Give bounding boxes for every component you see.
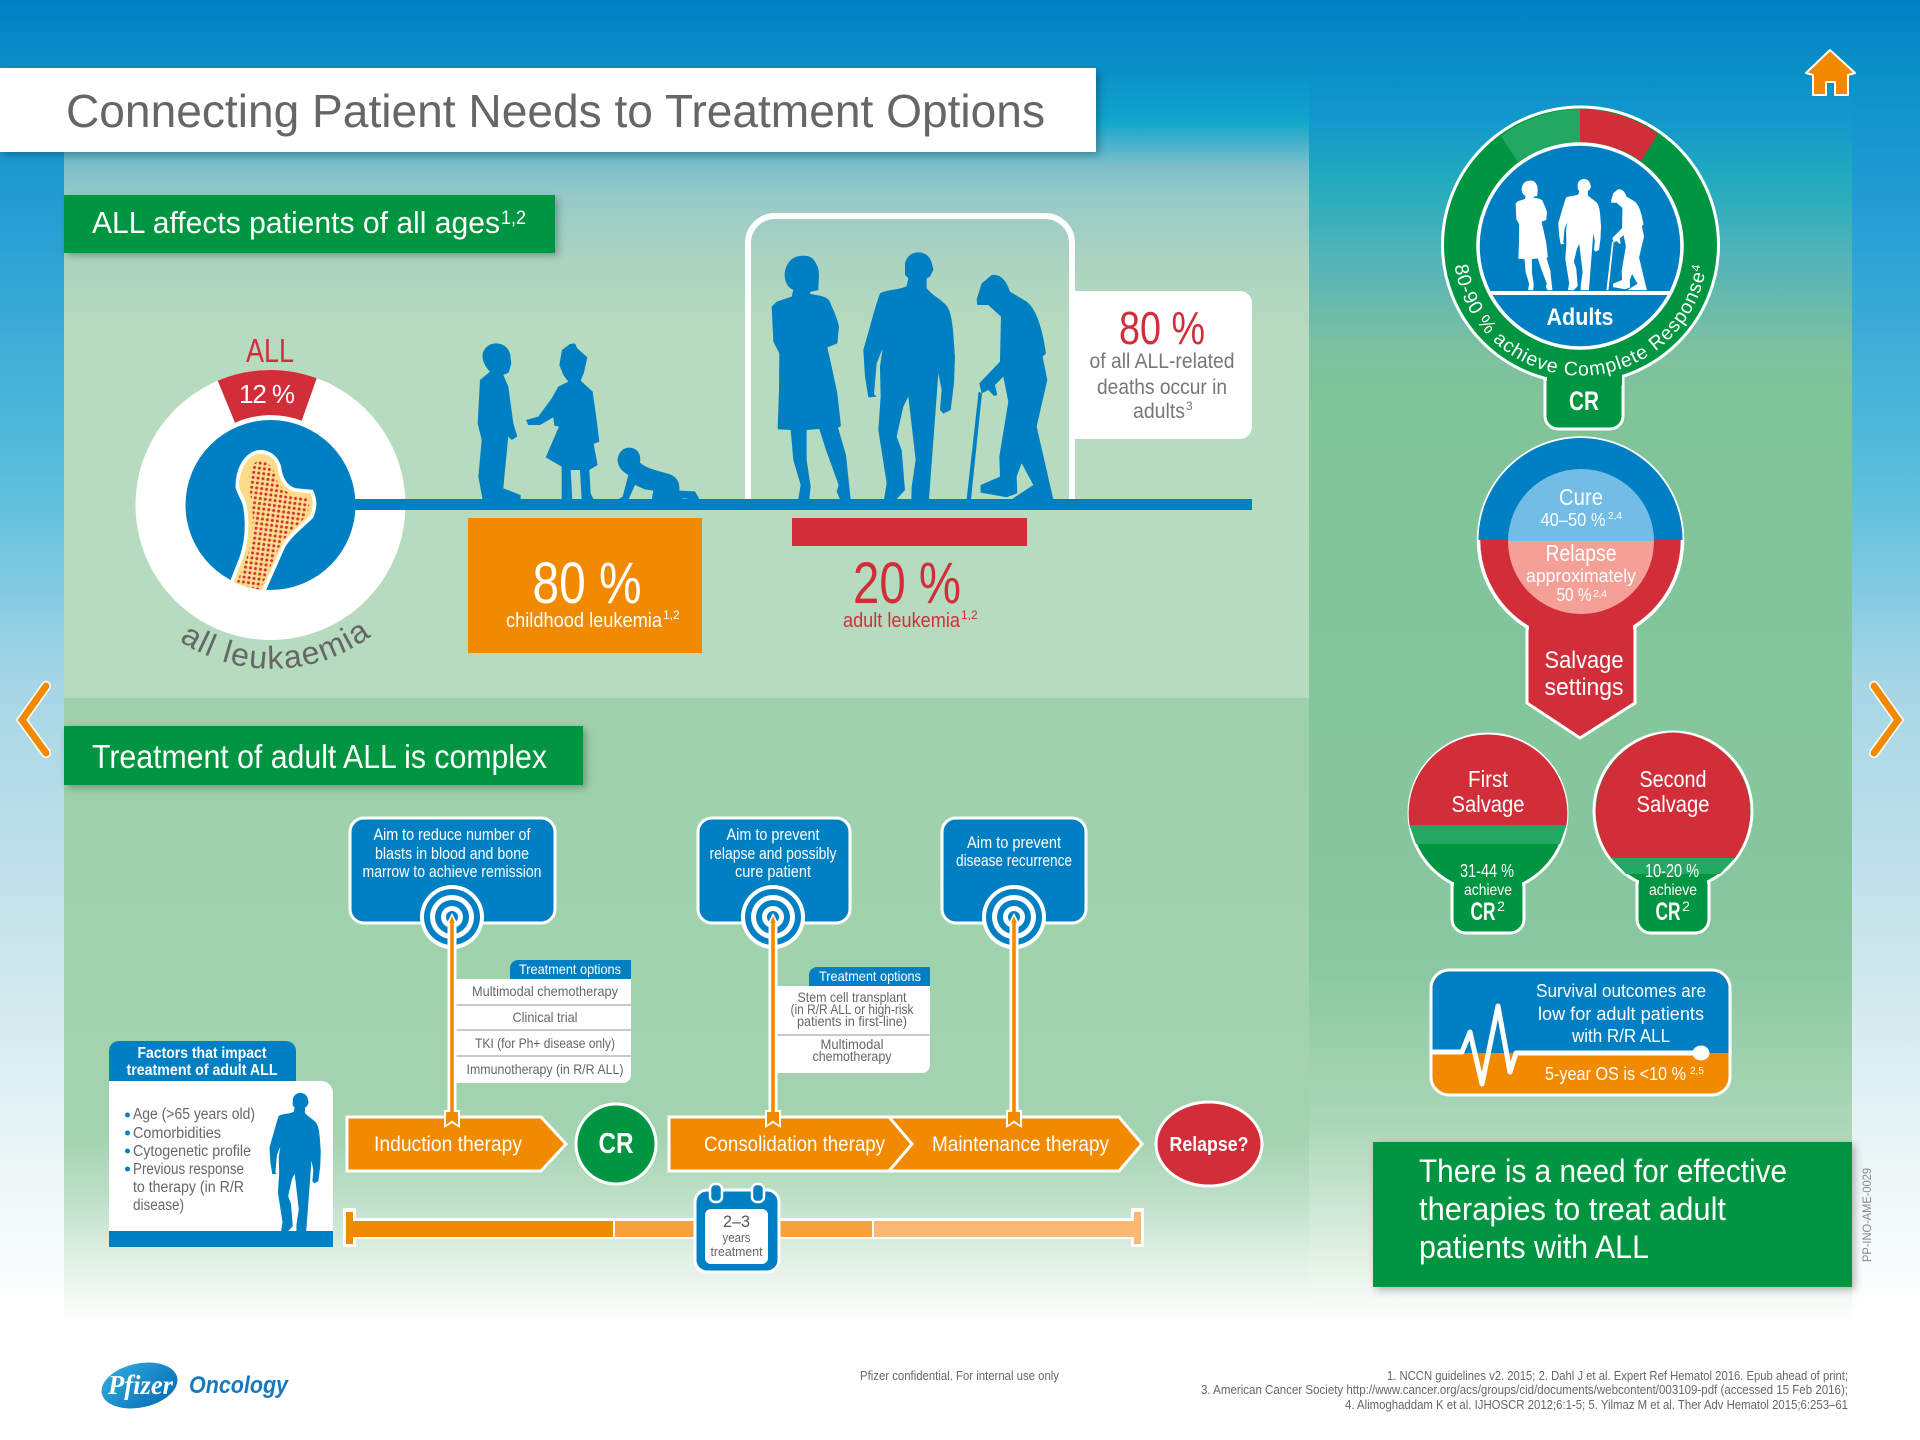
references: 4. Alimoghaddam K et al. IJHOSCR 2012;6:1-5; 5. Yilmaz M et al. Ther Adv Hematol 2015;6:253–61 [1345,1398,1848,1412]
heading: treatment of adult ALL is complex: Treatment of adult ALL is complex [92,738,547,775]
chart: first salvage: CR [1470,898,1496,926]
panel: treatment options consolidation: Multimodal [820,1036,884,1052]
panel: treatment options induction [456,960,631,1083]
arrow: consolidation therapy [669,1117,912,1171]
icon: target induction [420,885,484,949]
callout: consolidation aim: cure patient [735,863,811,881]
badge: relapse [1156,1102,1262,1186]
callout: maintenance aim: Aim to prevent [967,834,1061,852]
callout: 80 percent of deaths: 3 [1186,399,1193,413]
icon: calendar 2-3 years treatment: years [722,1231,750,1245]
chart: cure versus relapse: settings [1544,674,1624,701]
chart: cure versus relapse: Relapse [1546,540,1616,566]
chart: all leukaemia donut [136,332,406,669]
list: factors: Cytogenetic profile [133,1143,251,1160]
panel: childhood leukemia 80 percent [468,518,702,653]
heading: ALL affects patients of all ages: 1,2 [501,208,526,229]
chart: first salvage: 2 [1497,898,1505,914]
panel: survival outcomes [1431,970,1730,1095]
arrow: next [1874,686,1898,753]
panel: treatment options consolidation: Treatment options [819,968,921,984]
panel: adult leukemia 20 percent: 20 % [853,551,961,616]
panel: survival outcomes: low for adult patients [1538,1004,1704,1024]
icon: target maintenance [982,885,1046,949]
icon: bone [230,452,315,593]
panel: right column outcomes [1372,106,1871,1294]
callout: need for effective therapies [1373,1142,1852,1287]
icon: home [1806,50,1855,95]
icon: man silhouette [269,1093,321,1231]
panel: treatment options induction: Immunotherapy (in R/R ALL) [466,1061,624,1077]
confidentiality note: Pfizer confidential. For internal use only [860,1369,1060,1383]
arrow: maintenance therapy: Maintenance therapy [932,1133,1109,1156]
label: ring text: 80-90 % achieve Complete Response [1455,264,1704,376]
label: all leukaemia: all leukaemia [182,625,372,669]
chart: first salvage: Salvage [1452,791,1524,817]
icon: target consolidation [741,885,805,949]
icon: children silhouettes [478,343,700,500]
chart: cure versus relapse [1478,438,1682,738]
panel: factors that impact treatment [109,1041,333,1247]
panel: survival outcomes: 2,5 [1690,1066,1704,1077]
panel: childhood leukemia 80 percent: childhood leukemia [506,610,663,632]
icon: calendar 2-3 years treatment: 2–3 [723,1212,750,1231]
callout: need for effective therapies: There is a need for effective [1419,1153,1787,1189]
panel: childhood leukemia 80 percent: 1,2 [663,608,680,622]
panel: treatment options consolidation: (in R/R ALL or high-risk [790,1001,914,1017]
chart: cure versus relapse: approximately [1526,566,1636,586]
icon: calendar 2-3 years treatment: treatment [710,1245,763,1259]
label: ring text: 4 [1692,265,1700,272]
logo: Pfizer Oncology: Pfizer [107,1370,173,1400]
circle: blue core [186,420,356,590]
callout: induction aim [350,818,555,923]
callout: 80 percent of deaths: deaths occur in [1097,376,1227,399]
arrow: maintenance to target [1006,913,1022,1128]
arrow: previous [22,686,46,753]
list: factors: to therapy (in R/R [133,1179,244,1196]
arrow: induction therapy: Induction therapy [374,1133,522,1156]
panel: ALL affects patients [63,194,1252,669]
panel: lower left background [64,698,1309,1330]
heading: treatment of adult ALL is complex [64,726,583,785]
panel: treatment options induction: Multimodal chemotherapy [472,983,618,999]
label: CR: CR [1569,386,1599,416]
chart: cure versus relapse: 40–50 % [1540,510,1606,530]
chart: cure versus relapse: 2,4 [1593,589,1607,600]
list: factors: Comorbidities [133,1125,221,1142]
panel: survival outcomes: 5-year OS is <10 % [1545,1064,1686,1084]
panel: adult leukemia 20 percent: adult leukemia [843,610,961,632]
shape: salvage settings arrow [1527,620,1635,738]
panel: survival outcomes: with R/R ALL [1571,1026,1670,1046]
panel: treatment options consolidation: Stem cell transplant [798,989,907,1005]
icon: adult silhouettes white [1516,179,1647,290]
arrow: consolidation therapy: Consolidation therapy [704,1133,885,1156]
segment: relapse [1580,109,1658,161]
heading: factors [109,1041,296,1081]
panel: adult leukemia 20 percent [792,518,1027,632]
title [0,68,1096,152]
chart: second salvage [1594,732,1752,933]
chart: adults complete response ring [1441,106,1720,430]
references: 1. NCCN guidelines v2. 2015; 2. Dahl J et al. Expert Ref Hematol 2016. Epub ahead of print; [1387,1369,1848,1383]
arrow: maintenance therapy [888,1117,1142,1171]
code: document id: PP-INO-AME-0029 [1862,1168,1874,1262]
callout: need for effective therapies: patients with ALL [1419,1229,1649,1265]
chart: second salvage: 2 [1682,898,1690,914]
panel: treatment options induction: Clinical trial [512,1009,578,1025]
title: Connecting Patient Needs to Treatment Options [66,85,1045,137]
chart: second salvage: 10-20 % [1645,861,1699,881]
panel: upper left background [64,0,1309,698]
callout: consolidation aim: relapse and possibly [710,845,837,863]
chart: cure versus relapse: Cure [1559,484,1603,510]
callout: induction aim: blasts in blood and bone [375,845,529,863]
panel: treatment options consolidation: patients in first-line) [797,1013,907,1029]
callout: need for effective therapies: therapies to treat adult [1419,1191,1726,1227]
panel: treatment of adult ALL [64,726,1262,1272]
chart: cure versus relapse: Salvage [1544,647,1624,674]
callout: 80 percent of deaths: of all ALL-related [1090,350,1234,373]
references: 3. American Cancer Society http://www.cancer.org/acs/groups/cid/documents/webcontent/003109-pdf (accessed 15 Feb 2016); [1201,1383,1848,1397]
list: factors: disease) [133,1197,184,1214]
list: factors: Previous response [133,1161,244,1178]
heading: factors: treatment of adult ALL [126,1062,278,1079]
list: factors [125,1106,255,1214]
badge: relapse: Relapse? [1170,1134,1248,1156]
list: factors: Age (>65 years old) [133,1106,255,1123]
badge: CR [576,1104,656,1184]
callout: maintenance aim [942,818,1086,923]
label: adults: Adults [1546,304,1614,331]
icon: calendar 2-3 years treatment [695,1184,779,1272]
arrow: induction therapy [347,1117,566,1171]
heading: ALL affects patients of all ages [64,195,555,253]
panel: treatment options consolidation [777,967,930,1073]
chart: second salvage: CR [1656,898,1680,926]
timeline bar [355,499,1252,510]
callout: maintenance aim: disease recurrence [956,852,1072,870]
chart: second salvage: Salvage [1636,791,1710,817]
panel: treatment options induction: Treatment options [519,961,621,977]
callout: induction aim: marrow to achieve remission [362,863,542,881]
frame: adults [748,216,1072,499]
badge: CR: CR [598,1128,634,1160]
panel: childhood leukemia 80 percent: 80 % [532,551,642,616]
timeline: treatment duration [343,1208,1144,1247]
label: 12 percent: 12 % [239,379,295,409]
chart: first salvage: achieve [1464,882,1512,899]
chart: second salvage: Second [1640,766,1706,792]
panel: treatment options consolidation: chemotherapy [812,1048,892,1064]
callout: induction aim: Aim to reduce number of [374,826,531,844]
icon: heartbeat line [1433,1006,1710,1084]
callout: 80 percent of deaths: adults [1133,400,1185,423]
segment: ALL 12 percent [218,370,317,423]
callout: 80 percent of deaths: 80 % [1119,302,1205,354]
callout: consolidation aim [698,818,850,923]
logo: Pfizer Oncology: Oncology [189,1372,289,1399]
chart: second salvage: achieve [1649,882,1697,899]
references [1201,1369,1848,1412]
logo: Pfizer Oncology [97,1356,289,1415]
chart: cure versus relapse: 50 % [1556,585,1592,605]
panel: treatment options induction: TKI (for Ph+ disease only) [475,1035,615,1051]
heading: factors: Factors that impact [138,1045,266,1062]
panel: adult leukemia 20 percent: 1,2 [961,608,978,622]
chart: cure versus relapse: 2,4 [1608,511,1622,522]
panel: right column background [1309,0,1852,1330]
chart: first salvage: First [1468,766,1509,792]
arrow: consolidation to target [765,913,781,1128]
stem: CR [1545,360,1623,429]
callout: 80 percent of deaths [1075,291,1252,439]
label: ALL: ALL [246,332,294,369]
heading: ALL affects patients of all ages: ALL affects patients of all ages [92,205,500,240]
panel: survival outcomes: Survival outcomes are [1536,981,1706,1001]
segment: cure [1508,469,1654,541]
chart: first salvage: 31-44 % [1460,861,1514,881]
arrow: induction to target [444,913,460,1128]
segment: light green [1501,109,1580,162]
icon: adult silhouettes [772,252,1053,499]
circle: adults [1478,144,1682,348]
chart: first salvage [1409,734,1567,933]
segment: relapse [1508,541,1654,614]
callout: consolidation aim: Aim to prevent [726,826,820,844]
